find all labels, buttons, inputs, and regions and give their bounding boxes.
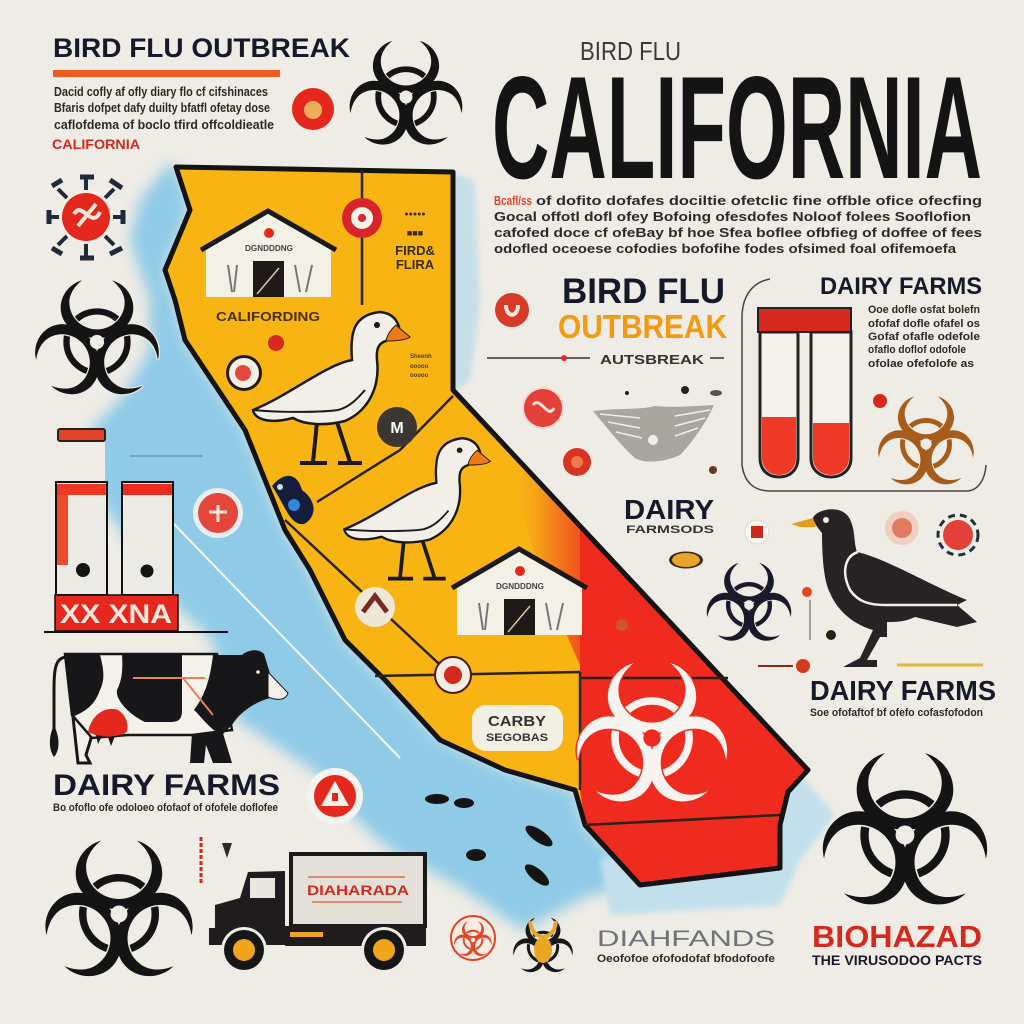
water north-east of the map bbox=[450, 172, 480, 395]
cow body bbox=[65, 654, 232, 738]
dairy subheading: FARMSODS bbox=[626, 524, 714, 536]
gold hazard bbox=[509, 917, 577, 977]
panel text: Gofaf ofafle odefole bbox=[868, 331, 980, 343]
map marker dark bbox=[377, 407, 417, 447]
biohazard left bbox=[25, 280, 169, 404]
panel: test tubes bbox=[742, 273, 986, 492]
left silo bbox=[56, 482, 107, 595]
right tube bbox=[811, 332, 851, 477]
right silo bbox=[122, 482, 173, 595]
outbreak heading bbox=[558, 272, 727, 345]
panel text: ofolae ofefolofe as bbox=[868, 358, 974, 370]
panel text: ofaflo doflof odofole bbox=[868, 344, 966, 356]
map label bird flu: ■■■ bbox=[407, 228, 423, 238]
crow bbox=[791, 509, 977, 667]
biohazard bottom left bbox=[34, 841, 204, 988]
map marker central bbox=[355, 587, 395, 627]
dairy farms left bbox=[53, 769, 280, 814]
virus icon bbox=[48, 177, 125, 258]
red badge bbox=[193, 488, 243, 538]
title paragraph: odofled oceoese cofodies bofofihe fodes ofsimed foal ofifemoefa bbox=[494, 241, 957, 256]
truck cab bbox=[209, 871, 285, 945]
coastal water bbox=[90, 163, 640, 930]
warning badge bbox=[307, 768, 363, 824]
truck bbox=[209, 854, 426, 973]
small icon: virus dark bbox=[938, 515, 978, 555]
small icon: marker bbox=[745, 520, 769, 544]
map label pill: CARBY bbox=[488, 713, 546, 730]
goose central bbox=[344, 438, 490, 579]
intro text: caflofdema of boclo tfird offcoldieatle bbox=[54, 117, 274, 132]
udder bbox=[88, 709, 128, 737]
dairy farms left: DAIRY FARMS bbox=[53, 769, 280, 802]
brown biohazard bbox=[871, 396, 981, 492]
map label bird flu: FLIRA bbox=[396, 257, 435, 272]
red badge bbox=[495, 293, 529, 327]
red dot desert bbox=[616, 619, 628, 631]
truck label bbox=[307, 877, 409, 902]
tiny map text: ooooo bbox=[410, 373, 429, 379]
outbreak rule bbox=[487, 352, 724, 367]
diahfands text: Oeofofoe ofofodofaf bfodofoofe bbox=[597, 953, 775, 965]
map marker west bbox=[226, 355, 262, 391]
grey wing illustration bbox=[593, 386, 722, 474]
truck label: DIAHARADA bbox=[307, 882, 409, 898]
intro text: Bfaris dofpet dafy duilty bfatfl ofetay dose bbox=[54, 100, 270, 115]
panel text: ofofaf dofle ofafel os bbox=[868, 318, 980, 330]
map label pill bbox=[472, 705, 563, 751]
truck box bbox=[291, 854, 425, 926]
small icon: virus light bbox=[885, 511, 919, 545]
map label bird flu: ●●●●● bbox=[404, 211, 426, 218]
cow tail bbox=[54, 657, 66, 740]
dairy farms right: Soe ofofaftof bf ofefo cofasfofodon bbox=[810, 707, 983, 719]
cow label lines bbox=[133, 678, 213, 715]
title paragraph: Gocal offotl dofl ofey Bofoing ofesdofes Noloof folees Sooflofion bbox=[494, 209, 971, 224]
biohazard on map bbox=[565, 663, 739, 814]
heading: BIRD FLU OUTBREAK bbox=[53, 33, 351, 63]
map marker north bbox=[342, 198, 382, 238]
header: bird flu outbreak bbox=[52, 33, 351, 152]
pills icon bbox=[669, 552, 703, 568]
red virus badge bbox=[522, 387, 564, 429]
panel outline bbox=[742, 279, 986, 491]
biohazard small bbox=[700, 563, 798, 648]
tiny map text: ooooo bbox=[410, 364, 429, 370]
biohazard footer text: BIOHAZAD bbox=[812, 919, 982, 954]
blue bird marker bbox=[272, 476, 314, 524]
red dot bbox=[268, 335, 284, 351]
white diagonal coast line bbox=[173, 523, 400, 758]
title paragraph: of dofito dofafes dociltie ofetclic fine offble ofice ofecfing bbox=[536, 193, 982, 208]
biohazard footer text bbox=[812, 919, 982, 968]
map of California bbox=[165, 167, 808, 885]
channel islands bbox=[425, 794, 556, 889]
cow front legs bbox=[190, 730, 232, 763]
panel text: Ooe dofle osfat bolefn bbox=[868, 304, 980, 316]
tube caps bbox=[758, 308, 851, 332]
dairy farms right: DAIRY FARMS bbox=[810, 675, 996, 706]
silo base bbox=[44, 595, 228, 632]
outbreak rule: AUTSBREAK bbox=[600, 352, 705, 367]
outbreak heading: BIRD FLU bbox=[562, 272, 725, 311]
title bbox=[492, 36, 982, 209]
small decorations near crow bbox=[758, 587, 983, 673]
map label california: CALIFORDING bbox=[216, 309, 320, 324]
cow bbox=[50, 650, 288, 763]
map label bird flu: FIRD& bbox=[395, 243, 435, 258]
biohazard large bbox=[810, 753, 1000, 918]
red dot bbox=[873, 394, 887, 408]
water around the east and south of the map bbox=[600, 775, 835, 915]
faint current line bbox=[130, 455, 203, 457]
left tube bbox=[760, 332, 798, 477]
goose north bbox=[253, 312, 410, 463]
title paragraph: Bcafl/ss bbox=[494, 193, 532, 208]
silo chimney bbox=[58, 429, 105, 482]
title paragraph: cafofed doce cf ofeBay bf hoe Sfea boflee ofbfieg of doffee of fees bbox=[494, 225, 982, 240]
outbreak heading: OUTBREAK bbox=[558, 308, 727, 345]
heading: DAIRY FARMS bbox=[820, 273, 982, 300]
dairy subheading: DAIRY bbox=[624, 494, 714, 525]
red rule bbox=[53, 70, 280, 77]
cow rear leg bbox=[72, 708, 92, 763]
california label: CALIFORNIA bbox=[52, 136, 140, 152]
map marker dark: M bbox=[390, 420, 404, 437]
diahfands text bbox=[597, 926, 775, 965]
silos bbox=[44, 429, 228, 632]
barn north bbox=[201, 211, 336, 297]
red virus badge bbox=[292, 88, 334, 130]
barn south bbox=[452, 549, 587, 635]
udder teats bbox=[96, 735, 115, 746]
biohazard top bbox=[341, 41, 471, 154]
silo base: XX XNA bbox=[60, 599, 172, 629]
dairy farms right bbox=[810, 675, 996, 719]
tiny map text: Sheenh bbox=[410, 354, 432, 360]
map marker south bbox=[435, 657, 471, 693]
red dot badge bbox=[563, 448, 591, 476]
intro text: Dacid cofly af ofly diary flo cf cifshinaces bbox=[54, 84, 268, 99]
map label pill: SEGOBAS bbox=[486, 732, 548, 744]
subtitle: BIRD FLU bbox=[580, 36, 681, 66]
dairy farms left: Bo ofoflo ofe odoloeo ofofaof of ofofele doflofee bbox=[53, 802, 278, 814]
red outline hazard bbox=[451, 916, 495, 960]
biohazard footer text: THE VIRUSODOO PACTS bbox=[812, 952, 982, 968]
pin bbox=[201, 837, 232, 885]
wheels bbox=[221, 927, 407, 973]
diahfands text: DIAHFANDS bbox=[597, 926, 775, 951]
